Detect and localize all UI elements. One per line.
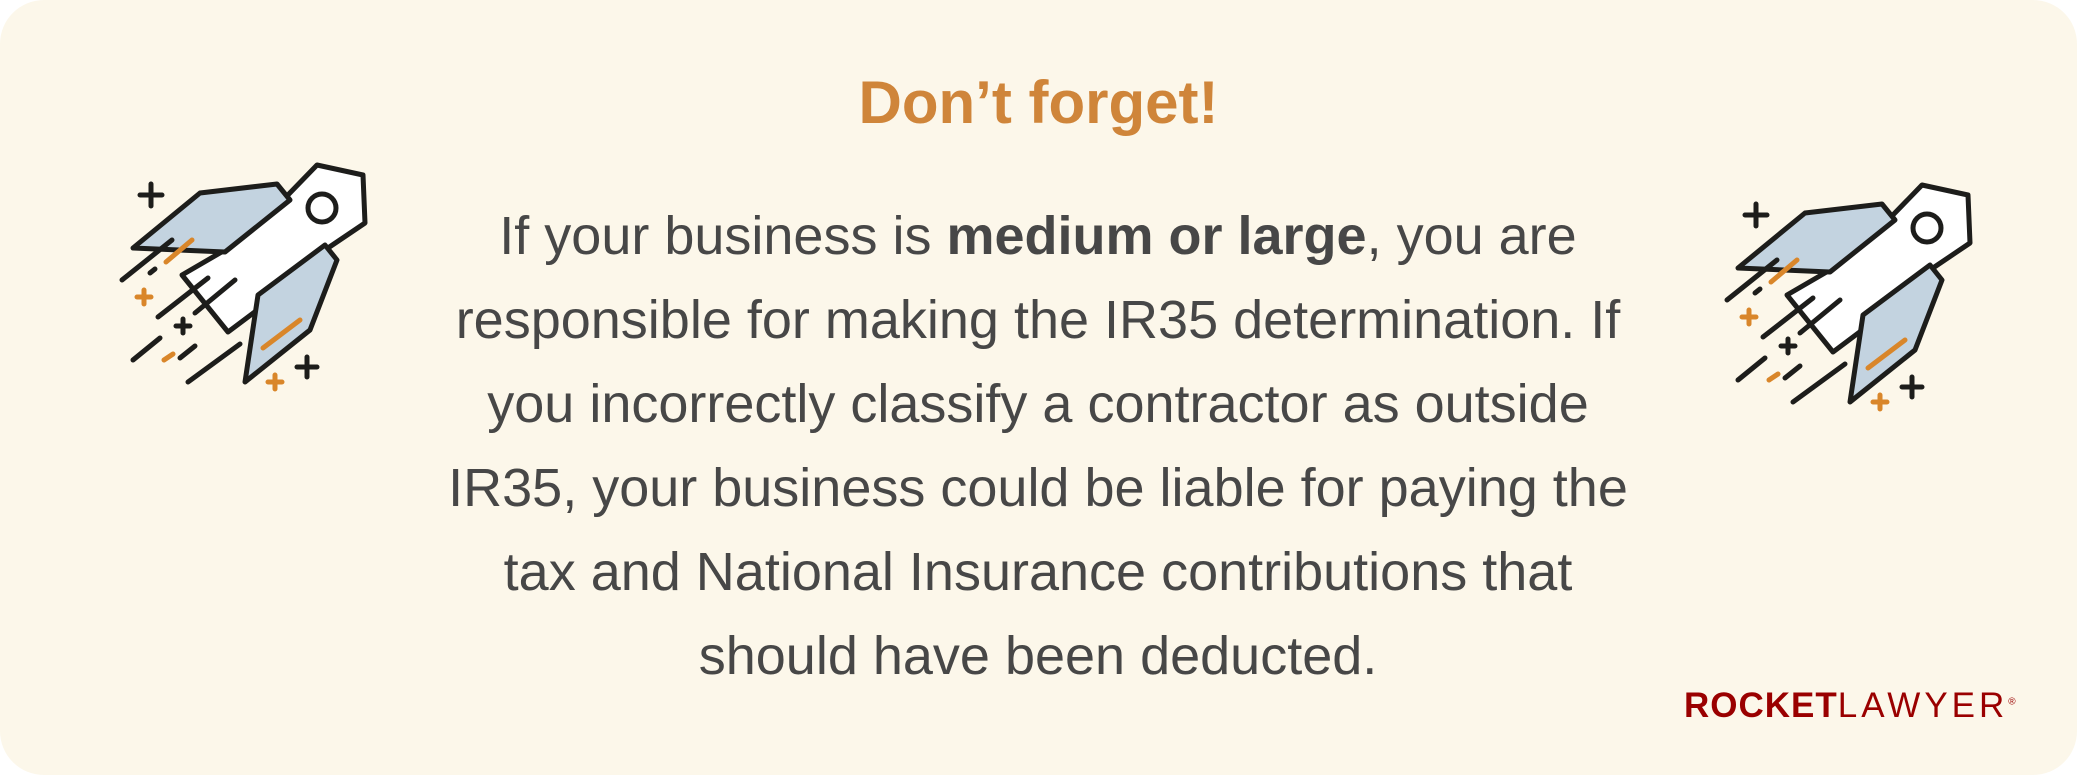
body text: should have been deducted.: [699, 626, 1377, 686]
body text: responsible for making the IR35 determination. If: [456, 290, 1620, 350]
body text: [448, 206, 1628, 686]
icon: rocket left: [120, 162, 368, 392]
body text: tax and National Insurance contributions that: [504, 542, 1572, 602]
logo: ROCKETLAWYER®: [1684, 686, 2017, 725]
body text: IR35, your business could be liable for paying the: [448, 458, 1628, 518]
icon: rocket right: [1724, 182, 1972, 412]
body text: If your business is medium or large, you are: [499, 206, 1577, 266]
body text: you incorrectly classify a contractor as outside: [487, 374, 1589, 434]
title: Don’t forget!: [859, 69, 1218, 136]
